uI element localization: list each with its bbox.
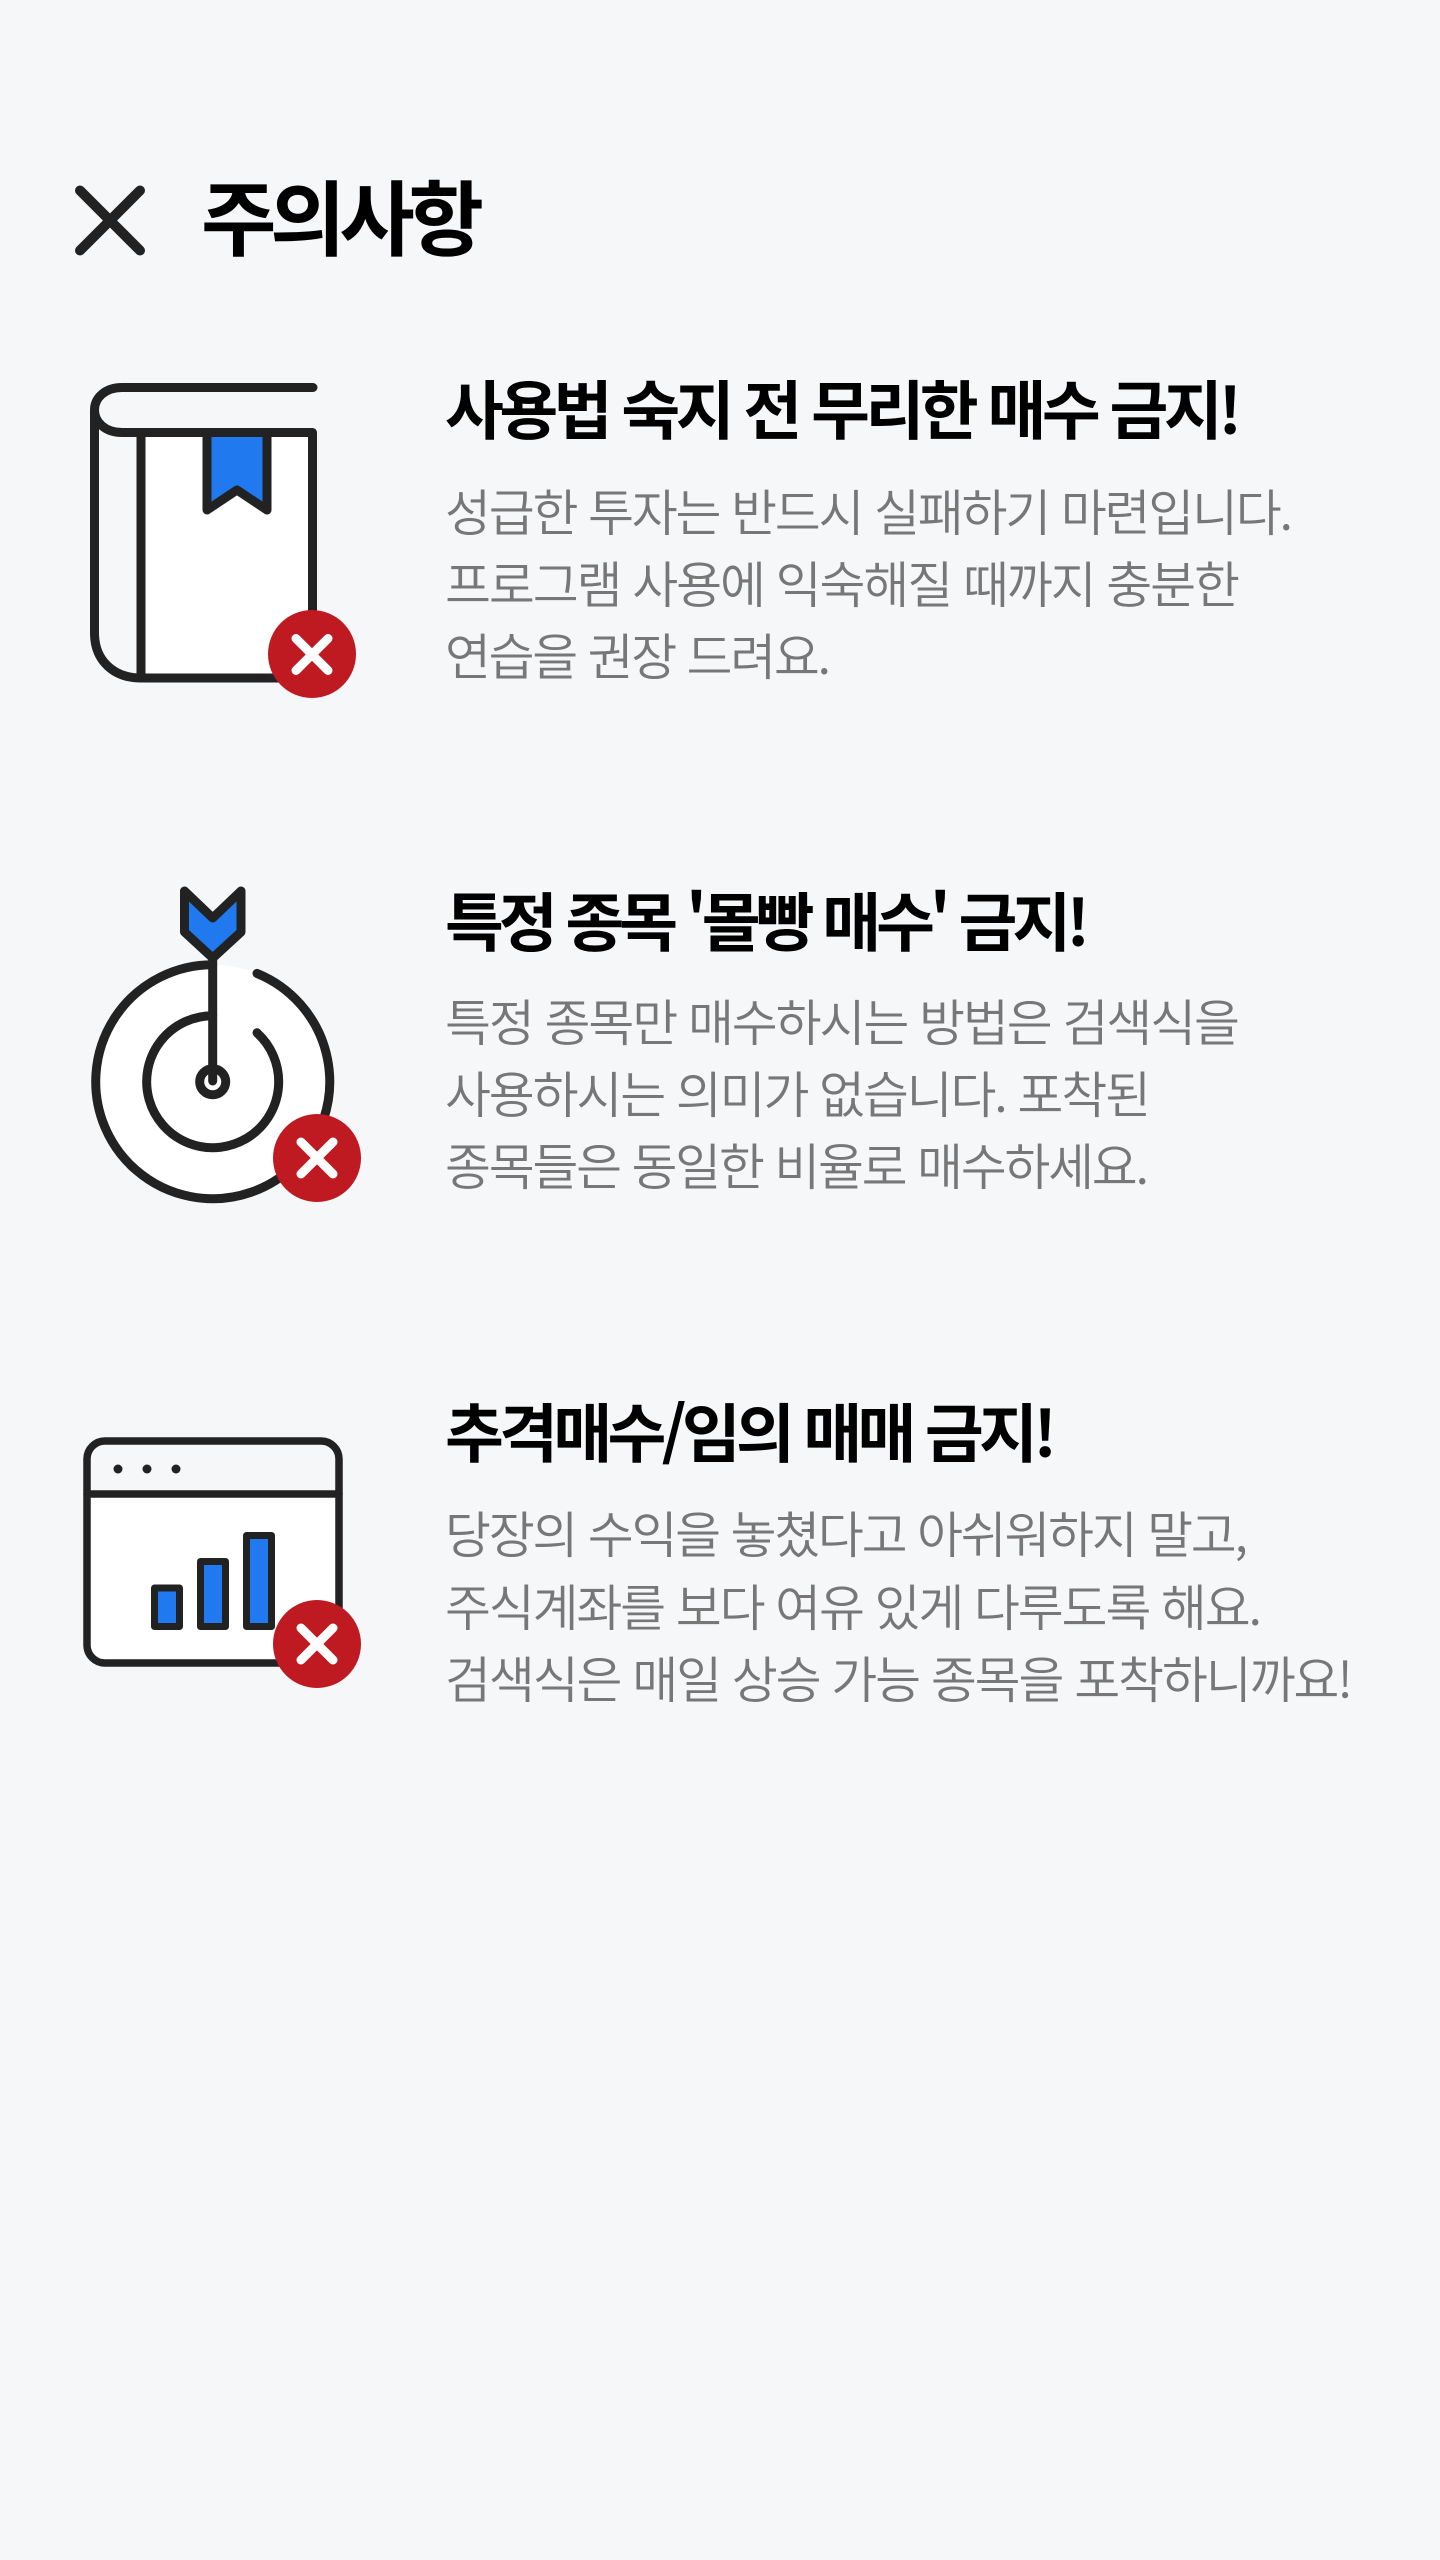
text block: warning 2 bbox=[445, 984, 1240, 1200]
text block: warning 2: 종목들은 동일한 비율로 매수하세요. bbox=[445, 1128, 1149, 1200]
icon: book with bookmark bbox=[94, 388, 356, 698]
icon: red cross badge bbox=[268, 610, 356, 698]
icon: red cross badge bbox=[273, 1600, 361, 1688]
icon: red cross badge bbox=[273, 1114, 361, 1202]
text block: warning 2: 사용하시는 의미가 없습니다. 포착된 bbox=[445, 1056, 1151, 1128]
text block: warning 1: 연습을 권장 드려요. bbox=[445, 618, 831, 690]
panel: warning 1 bbox=[94, 361, 1293, 698]
icon: target with arrow bbox=[96, 891, 361, 1202]
icon: header close mark bbox=[80, 190, 140, 250]
icon: browser window with bar chart bbox=[87, 1441, 361, 1688]
text block: warning 1 bbox=[445, 474, 1293, 690]
text block: warning 3: 검색식은 매일 상승 가능 종목을 포착하니까요! bbox=[445, 1641, 1353, 1713]
panel: warning 2 bbox=[96, 873, 1240, 1202]
title: 주의사항 bbox=[201, 154, 484, 273]
text block: warning 3 bbox=[445, 1496, 1353, 1713]
heading: warning 1: 사용법 숙지 전 무리한 매수 금지! bbox=[445, 361, 1242, 453]
heading: warning 3: 추격매수/임의 매매 금지! bbox=[445, 1384, 1057, 1476]
panel: warning 3 bbox=[87, 1384, 1353, 1713]
text block: warning 3: 주식계좌를 보다 여유 있게 다루도록 해요. bbox=[445, 1569, 1262, 1641]
text block: warning 3: 당장의 수익을 놓쳤다고 아쉬워하지 말고, bbox=[445, 1496, 1248, 1568]
text block: warning 2: 특정 종목만 매수하시는 방법은 검색식을 bbox=[445, 984, 1240, 1056]
text block: warning 1: 프로그램 사용에 익숙해질 때까지 충분한 bbox=[445, 546, 1240, 618]
text block: warning 1: 성급한 투자는 반드시 실패하기 마련입니다. bbox=[445, 474, 1293, 546]
heading: warning 2: 특정 종목 '몰빵 매수' 금지! bbox=[445, 873, 1090, 965]
